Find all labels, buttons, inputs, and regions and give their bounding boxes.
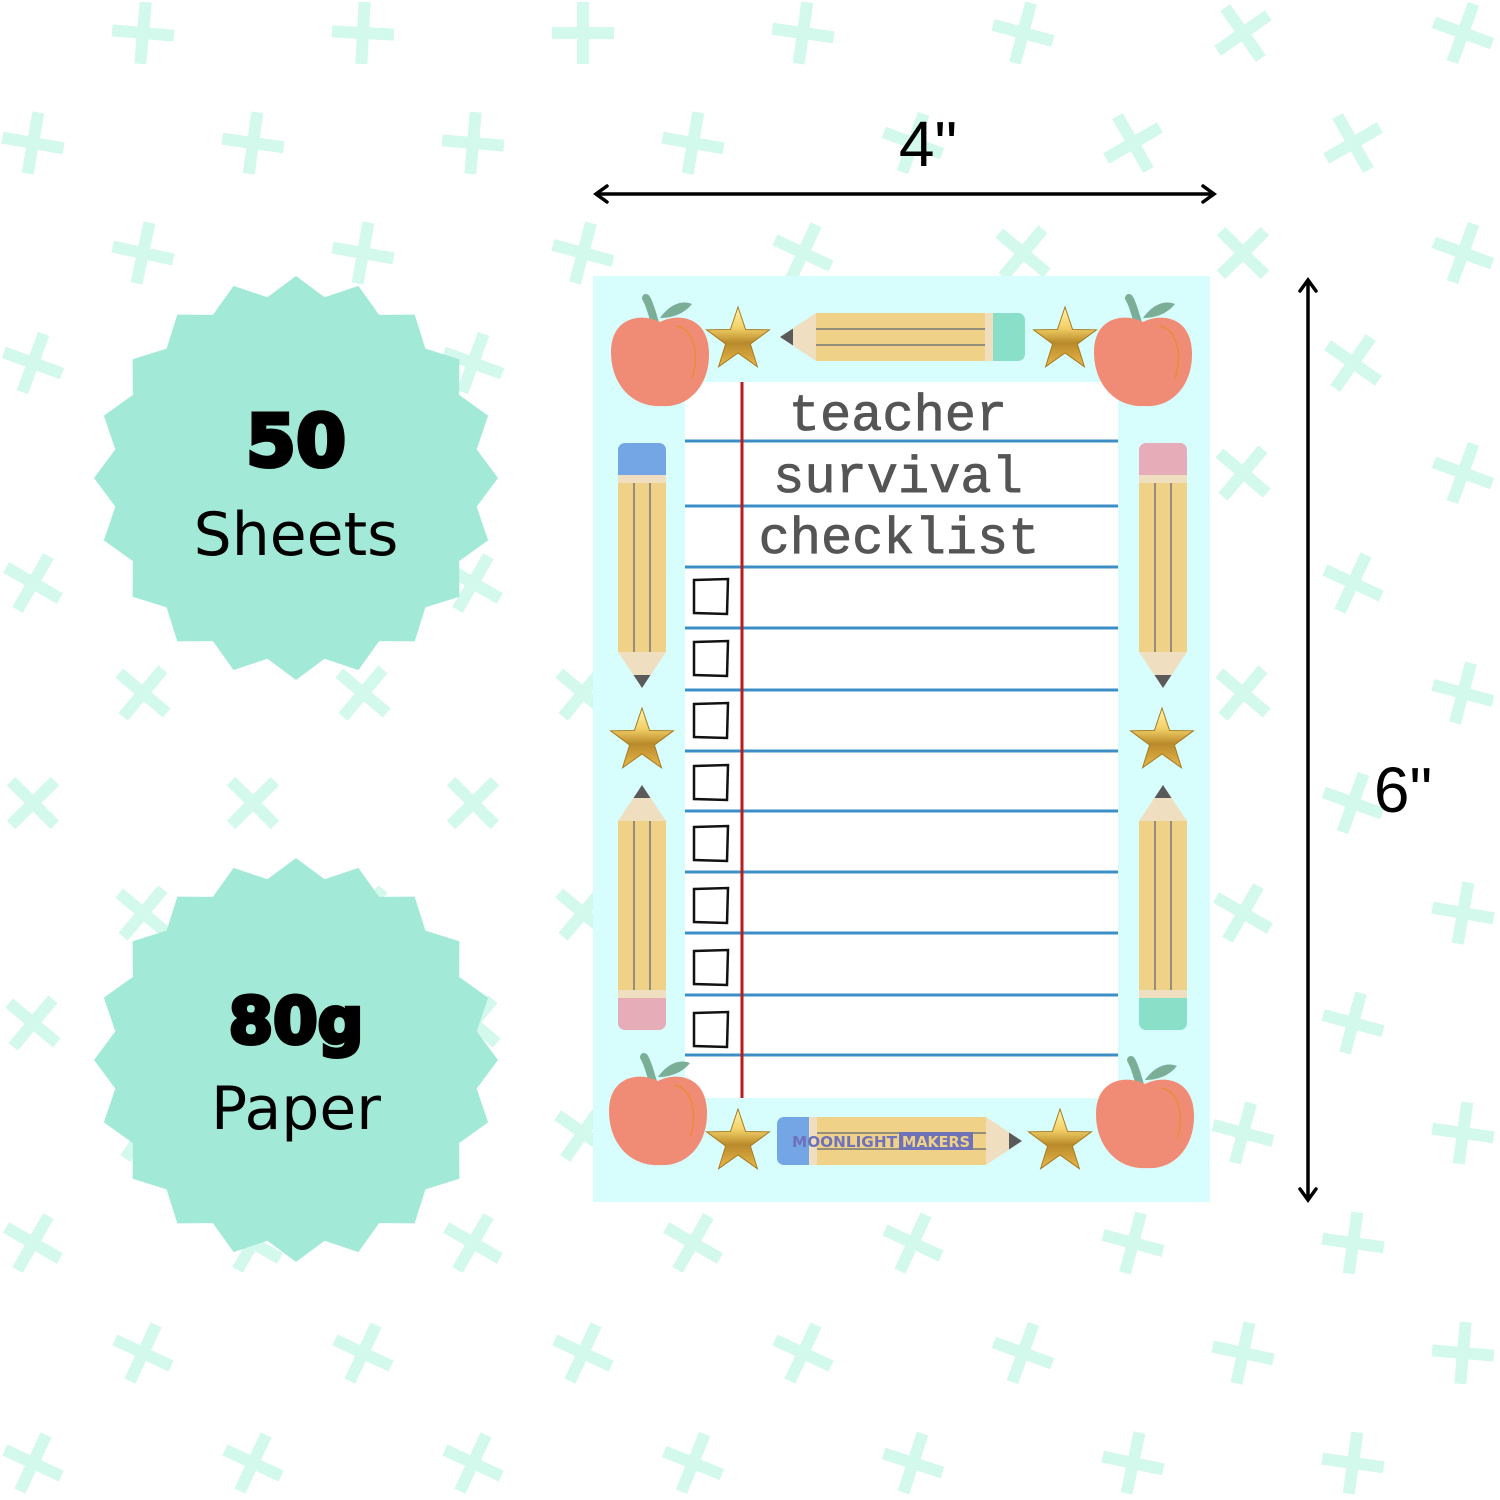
- arrow: width 4 inches: [596, 108, 1214, 202]
- title: teacher survival checklist: [759, 387, 1039, 569]
- title: teacher survival checklist: teacher: [789, 387, 1007, 446]
- badge: 80g paper: 80g: [229, 985, 363, 1059]
- badge: 80g paper: Paper: [211, 1074, 381, 1144]
- badge: 50 sheets: [94, 276, 498, 680]
- title: teacher survival checklist: checklist: [759, 510, 1039, 569]
- badge: 50 sheets: 50: [246, 399, 346, 483]
- pencil: top: [780, 313, 1025, 361]
- badge: 80g paper: [94, 858, 498, 1262]
- arrow: width 4 inches: 4": [899, 108, 957, 180]
- stars: [611, 307, 1193, 1169]
- checkboxes: [694, 579, 728, 1047]
- pencil: right top: [1139, 443, 1187, 688]
- notepad: [593, 276, 1210, 1202]
- pencil: bottom with logo: MAKERS: [902, 1133, 970, 1151]
- pencil: left top: [618, 443, 666, 688]
- pencil: bottom with logo: [777, 1117, 1022, 1165]
- title: teacher survival checklist: survival: [773, 449, 1023, 508]
- pencil: left bottom: [618, 785, 666, 1030]
- pencil: right bottom: [1139, 785, 1187, 1030]
- arrow: height 6 inches: [1300, 280, 1432, 1200]
- badge: 50 sheets: Sheets: [194, 500, 398, 570]
- arrow: height 6 inches: 6": [1374, 754, 1432, 826]
- pencil: bottom with logo: MOONLIGHT: [792, 1133, 898, 1151]
- paper sheet: [685, 382, 1118, 1098]
- apples: [609, 298, 1194, 1168]
